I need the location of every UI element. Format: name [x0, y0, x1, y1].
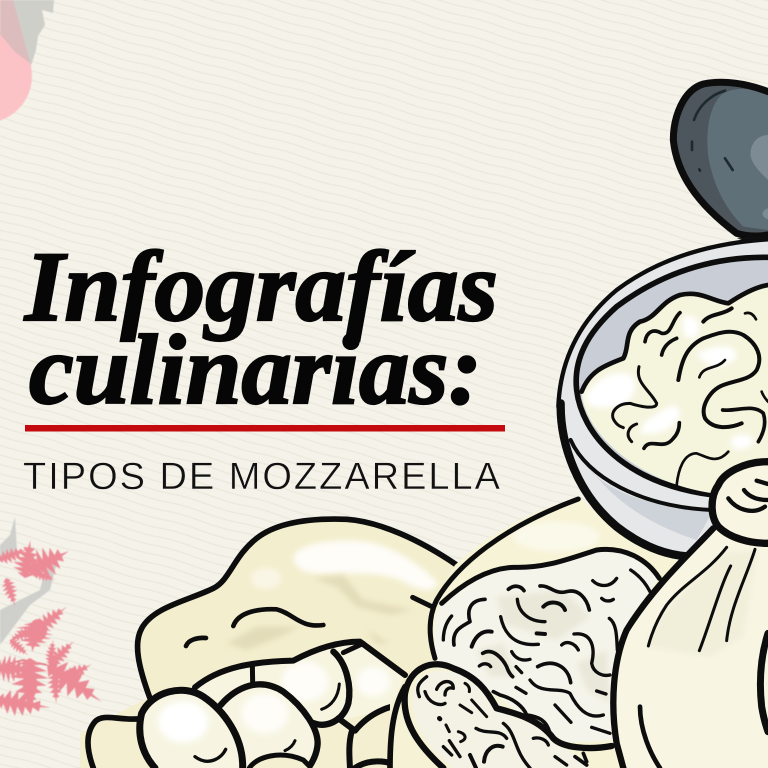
bowl: [557, 239, 768, 557]
sack body: [613, 528, 768, 768]
small mozzarella balls: [88, 642, 405, 768]
small torn piece: [390, 662, 612, 768]
sack knot: [712, 462, 768, 543]
plant: top-left radish and leaf: [0, 0, 54, 123]
spoon: [673, 82, 768, 268]
torn mozzarella ball: [413, 498, 680, 768]
stretched mozzarella in bowl: [582, 285, 768, 493]
large mozzarella: [80, 519, 480, 768]
title: [24, 231, 498, 425]
illustration: spoon and bowl of mozzarella: [557, 82, 768, 557]
illustration: mozzarella sack: [613, 462, 768, 768]
red divider: [25, 425, 505, 432]
title: Infografías: [24, 231, 498, 342]
subtitle: TIPOS DE MOZZARELLA: [23, 456, 501, 498]
title: culinarias:: [29, 314, 482, 425]
illustration: mozzarella pile left: [80, 519, 480, 768]
plant: lower-left red fern: [0, 517, 111, 721]
illustration: mozzarella ball and torn pieces: [390, 498, 680, 768]
